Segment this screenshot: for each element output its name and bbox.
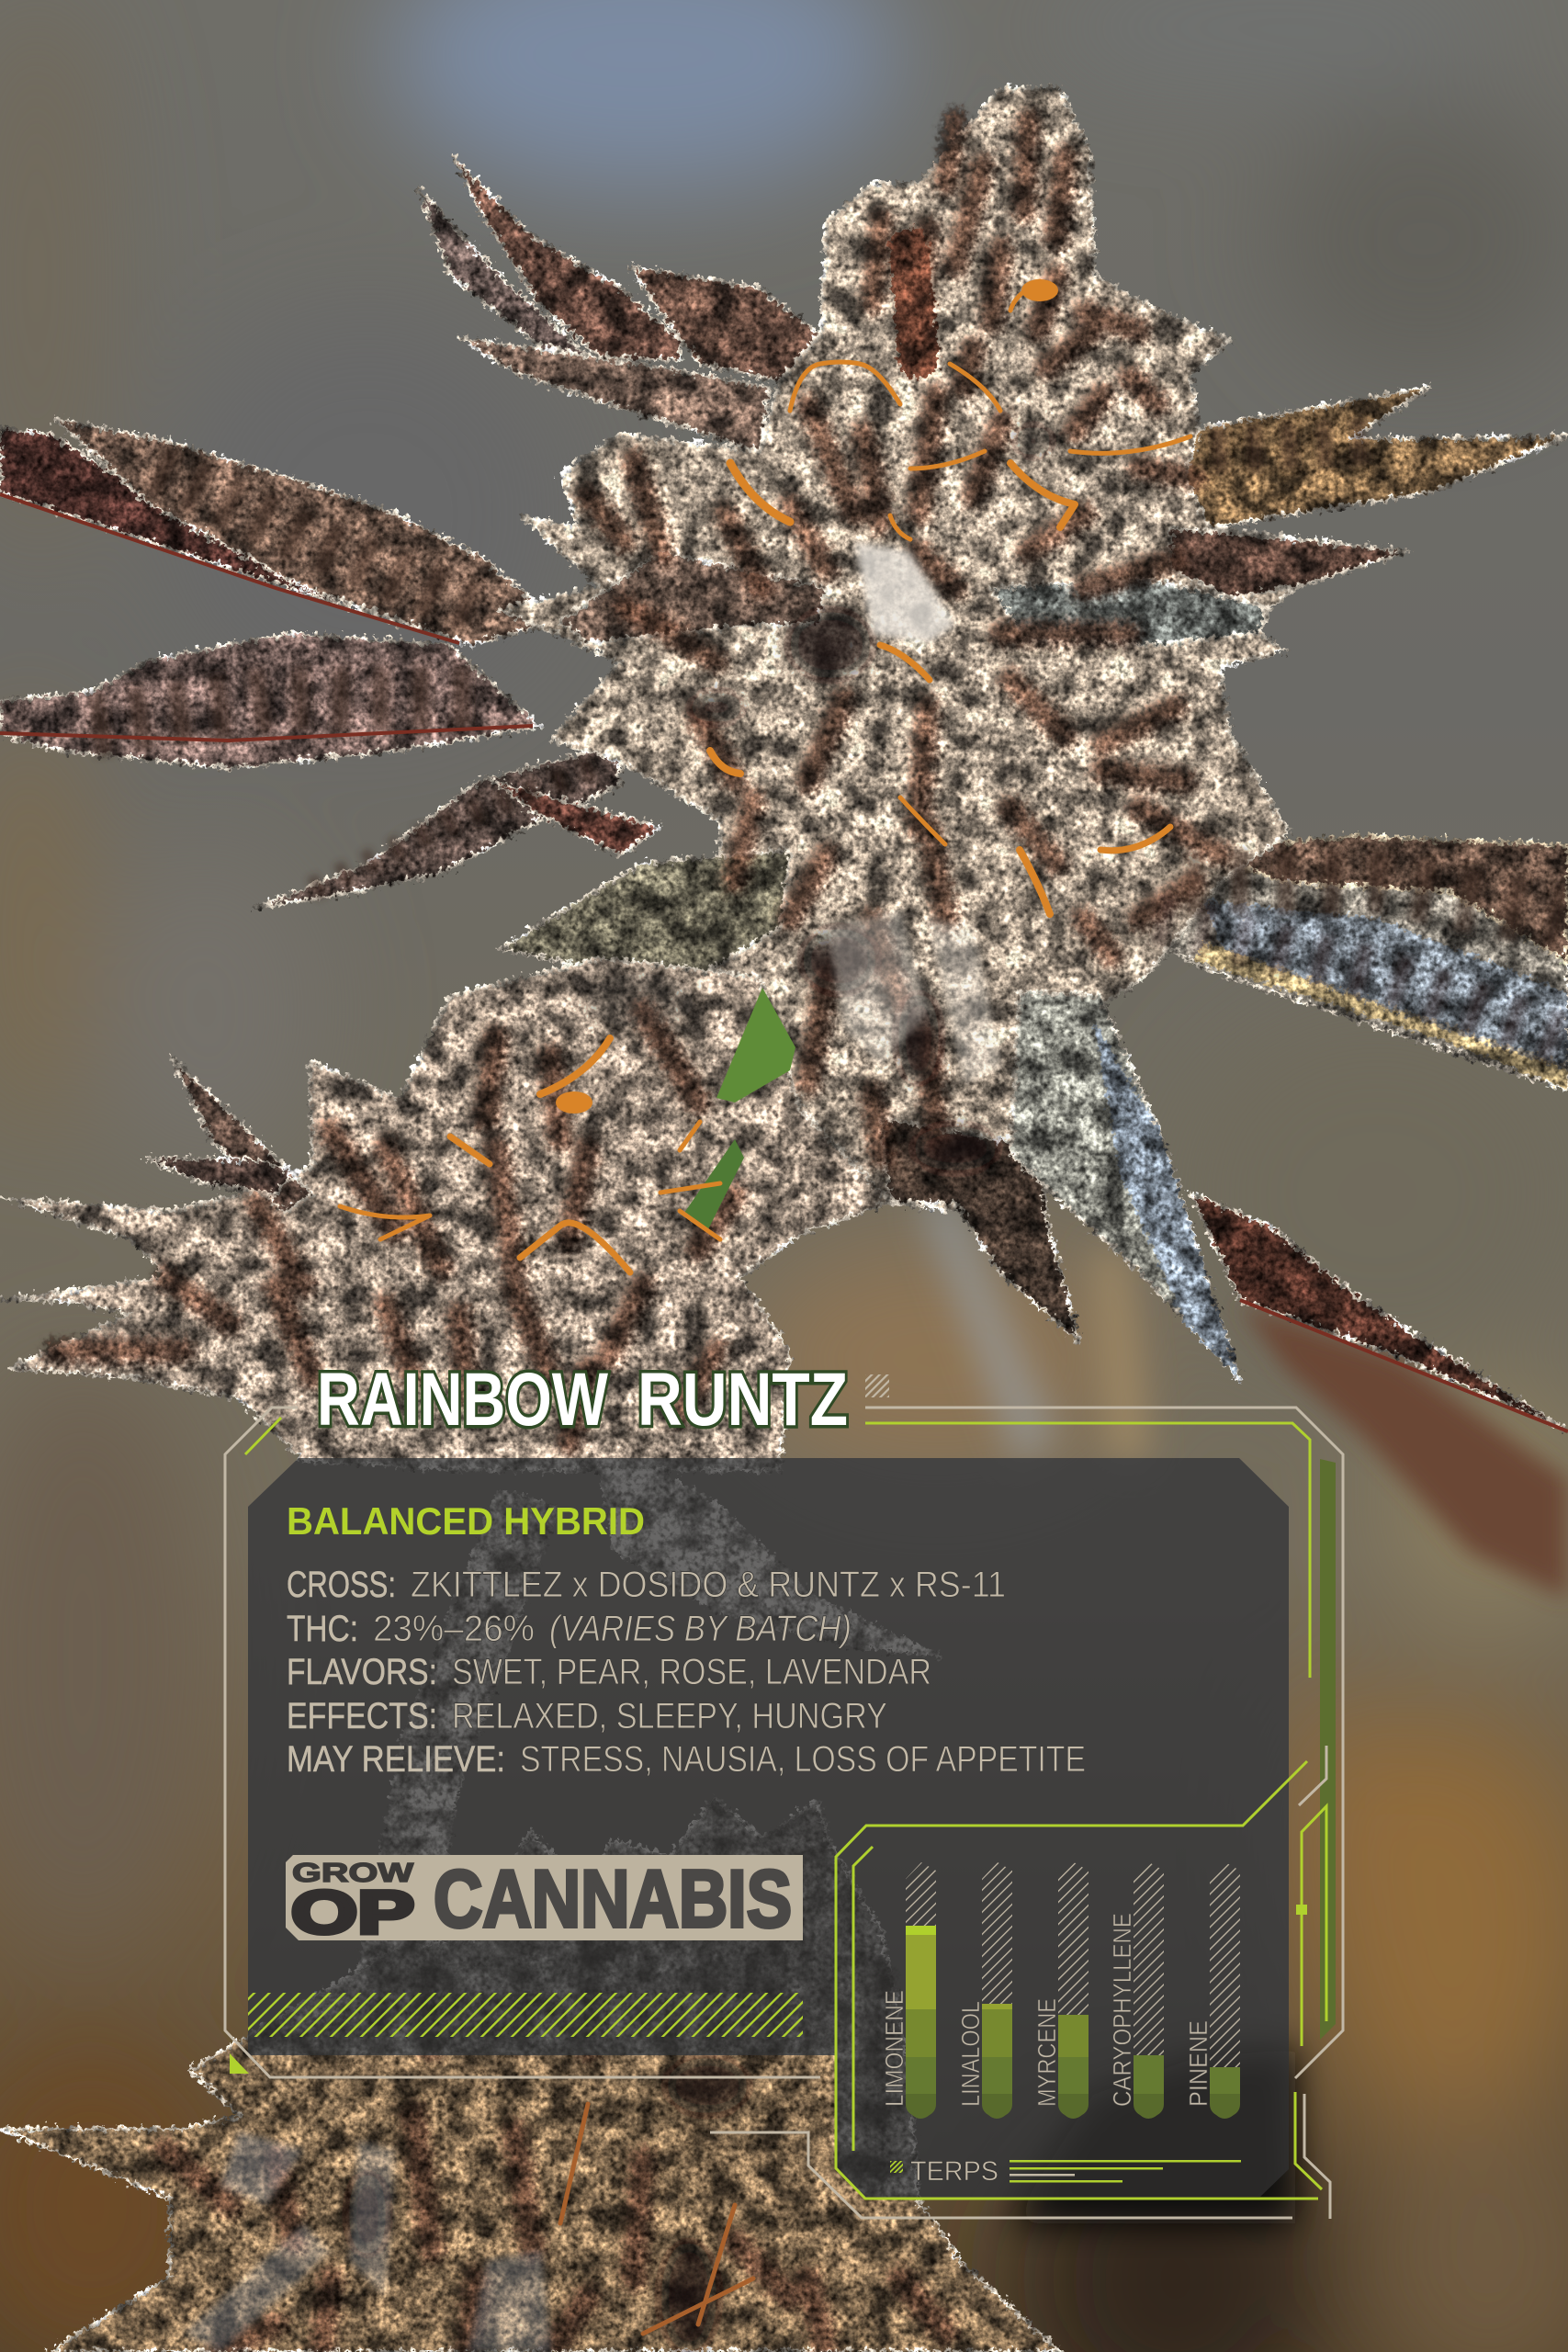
bud bract centres <box>55 119 1222 2352</box>
line: thc <box>287 1609 852 1649</box>
frame: lime corner triangle <box>230 2053 249 2074</box>
frame: tan bottom bracket <box>710 2132 1292 2218</box>
lime hatch band <box>248 1993 803 2037</box>
leaf: spiky right side blades <box>1185 387 1568 527</box>
frame: lime top line <box>865 1423 1310 1678</box>
reddish brown bract <box>909 248 919 358</box>
leaf: frosted blue-grey right of centre <box>990 579 1265 645</box>
leaf: left dark back blade <box>0 428 450 639</box>
leaf: dark brown right of centre <box>1170 527 1410 597</box>
line: flavors: FLAVORS: <box>287 1652 437 1692</box>
title <box>317 1358 848 1442</box>
leaf: right large blade <box>1060 836 1568 1090</box>
leaf: frosted left of centre <box>560 551 827 643</box>
bar: pinene: PINENE <box>1184 2020 1213 2107</box>
line: thc: (VARIES BY BATCH) <box>549 1609 852 1649</box>
line: effects: RELAXED, SLEEPY, HUNGRY <box>452 1696 887 1736</box>
leaf: central lower blade <box>1010 991 1240 1380</box>
subtitle: BALANCED HYBRID <box>287 1499 645 1543</box>
frost highlights <box>184 542 1001 2352</box>
dark pockets <box>349 426 1052 2352</box>
bar: caryophyllene <box>1108 1862 1164 2119</box>
frame: lime terps chart border <box>836 1761 1318 2199</box>
ghost leaf and stem below title <box>593 1433 941 1657</box>
lower bud <box>0 958 890 1470</box>
frame: lime lower right bracket <box>1295 2092 1322 2189</box>
panel: dark translucent card <box>248 1458 1289 2199</box>
line: thc: 23%–26% <box>373 1609 535 1649</box>
line: may relieve <box>287 1739 1086 1780</box>
frame: lime node square <box>1296 1905 1307 1915</box>
line: cross: CROSS: <box>287 1565 396 1605</box>
terps label: TERPS <box>910 2156 998 2187</box>
line: may relieve: STRESS, NAUSIA, LOSS OF APPETITE <box>520 1739 1086 1780</box>
line: effects <box>287 1696 887 1736</box>
leaf: dark leaves under centre <box>880 1117 1080 1342</box>
line: thc: THC: <box>287 1609 358 1649</box>
bar: limonene <box>880 1862 936 2119</box>
frame: lime corner tick <box>245 1418 281 1454</box>
leaf: thin spikes of lower bud <box>170 1057 312 1213</box>
frame: tan lower right bracket <box>1304 2094 1330 2219</box>
central bud mass <box>500 88 1568 1213</box>
photo: blurred stem streaks <box>919 1194 1148 1470</box>
strain details <box>287 1565 1086 1780</box>
bar: linalool <box>956 1862 1012 2119</box>
orange pistils <box>340 281 1190 2334</box>
frame: tan outline left and bottom <box>225 1408 820 2077</box>
right green band <box>1320 1459 1336 2040</box>
orange pistil clusters <box>556 279 1058 1114</box>
terps label <box>890 2156 1241 2187</box>
logo: grow op cannabis: CANNABIS <box>434 1853 792 1944</box>
leaf: dark brown lower right <box>1190 1193 1568 1431</box>
frame: lime right bracket <box>1302 1806 1326 2046</box>
title: RAINBOW <box>317 1358 608 1442</box>
leaf ridges <box>92 441 1562 1038</box>
logo: grow op cannabis: GROW <box>292 1859 414 1888</box>
leaf: left front blade <box>55 419 560 645</box>
line: effects: EFFECTS: <box>287 1696 437 1736</box>
line: cross: ZKITTLEZ x DOSIDO & RUNTZ x RS-11 <box>411 1565 1006 1605</box>
title: RUNTZ <box>637 1358 848 1442</box>
terpene bar chart <box>880 1862 1240 2119</box>
bar: caryophyllene: CARYOPHYLLENE <box>1108 1913 1136 2107</box>
frame: tan inner right stub <box>1299 1746 1326 1805</box>
leaf: left low blade <box>0 633 540 768</box>
line: may relieve: MAY RELIEVE: <box>287 1739 505 1780</box>
green stem <box>684 988 795 1231</box>
photo: blurred background leaf <box>1240 1305 1568 1599</box>
leaf: upper prongs <box>452 155 680 360</box>
logo: grow op cannabis: OP <box>291 1878 414 1946</box>
bar: linalool: LINALOOL <box>956 2001 985 2107</box>
bar: myrcene <box>1032 1862 1089 2119</box>
bottom bud <box>0 1796 1060 2352</box>
leaf: light front leaf left of centre <box>500 850 790 977</box>
frame: lime terps inner corner <box>853 1847 873 2151</box>
title hatch mark <box>865 1374 889 1397</box>
line: flavors: SWET, PEAR, ROSE, LAVENDAR <box>452 1652 931 1692</box>
bar: myrcene: MYRCENE <box>1032 1998 1061 2107</box>
leaf midribs <box>0 494 1568 1431</box>
logo: grow op cannabis <box>286 1853 803 1946</box>
leaf: lower left dark blade <box>255 744 620 908</box>
photo: dark blur under chart <box>1010 2049 1295 2223</box>
line: flavors <box>287 1652 931 1692</box>
bar: limonene: LIMONENE <box>880 1990 908 2107</box>
frame: tan outline top and right <box>865 1408 1343 2078</box>
bar: pinene <box>1184 1862 1240 2119</box>
